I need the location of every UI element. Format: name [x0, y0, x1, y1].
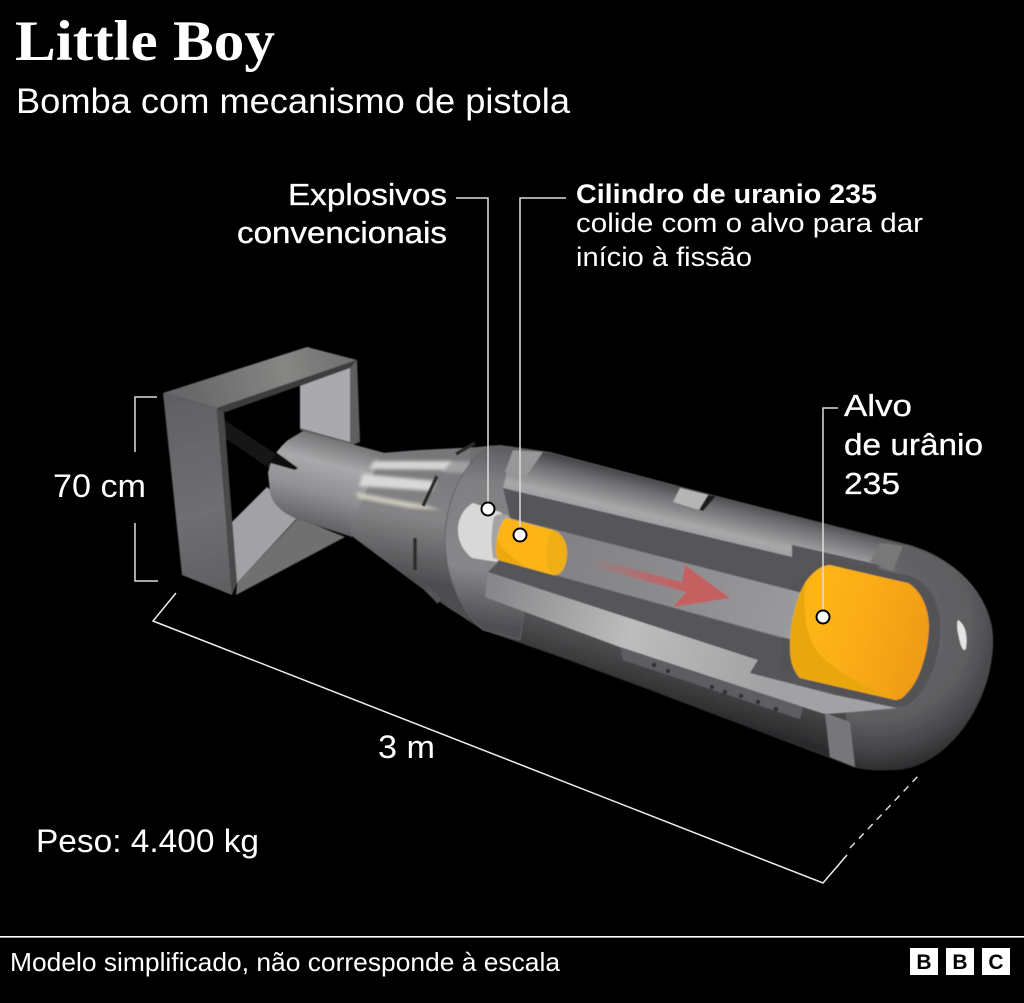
footer note: Modelo simplificado, não corresponde à escala — [10, 947, 561, 977]
weight label: Peso: 4.400 kg — [36, 823, 259, 859]
BBC logo: B — [952, 951, 968, 974]
panel rivets — [652, 663, 778, 711]
lower light stripe — [485, 572, 897, 714]
uranium cylinder — [496, 518, 567, 575]
BBC logo — [910, 948, 1010, 975]
fin slit — [270, 452, 298, 470]
explosive charge — [458, 503, 510, 562]
upper light stripe — [503, 449, 905, 565]
callout: explosivos convencionais: Explosivos — [288, 177, 447, 212]
straps and latch — [505, 450, 903, 767]
height dimension: 70 cm: 70 cm — [53, 468, 146, 504]
length dimension: 3 m: 3 m — [378, 729, 435, 765]
callout: alvo de uranio: 235 — [844, 466, 900, 501]
callout: alvo de uranio: Alvo — [844, 388, 912, 423]
cone highlights — [356, 461, 480, 510]
callout: alvo de uranio: de urânio — [844, 427, 983, 462]
nose highlights — [957, 620, 967, 650]
footer rule — [0, 936, 1024, 938]
length dimension: 3 m — [153, 593, 920, 883]
lower bracket — [424, 586, 441, 604]
height dimension: 70 cm — [53, 397, 158, 581]
nose dome — [845, 543, 993, 770]
electronics panel — [620, 647, 803, 719]
callout: cilindro de uranio: início à fissão — [576, 242, 752, 272]
callout: alvo de uranio — [816, 388, 983, 624]
cone slits — [415, 443, 475, 570]
body shell — [470, 445, 993, 770]
aft section — [445, 446, 545, 640]
tail frame — [163, 347, 360, 595]
cone — [350, 447, 500, 630]
lower dark band — [488, 560, 850, 694]
subtitle: Bomba com mecanismo de pistola — [16, 82, 571, 121]
callout: cilindro de uranio: Cilindro de uranio 235 — [576, 179, 877, 209]
callout: explosivos convencionais: convencionais — [237, 215, 447, 250]
bomb illustration — [163, 347, 993, 770]
motion arrow — [588, 557, 730, 607]
channel — [500, 518, 810, 642]
nozzle — [268, 431, 385, 537]
title: Little Boy — [15, 10, 275, 73]
callout: explosivos convencionais — [237, 177, 494, 516]
target cavity ring — [780, 558, 940, 707]
uranium target — [790, 565, 929, 700]
callout: cilindro de uranio — [514, 179, 923, 542]
BBC logo: C — [988, 951, 1004, 974]
upper dark band — [503, 488, 880, 620]
callout: cilindro de uranio: colide com o alvo para dar — [576, 208, 923, 238]
BBC logo: B — [916, 951, 932, 974]
explosive inner shade — [492, 514, 512, 560]
